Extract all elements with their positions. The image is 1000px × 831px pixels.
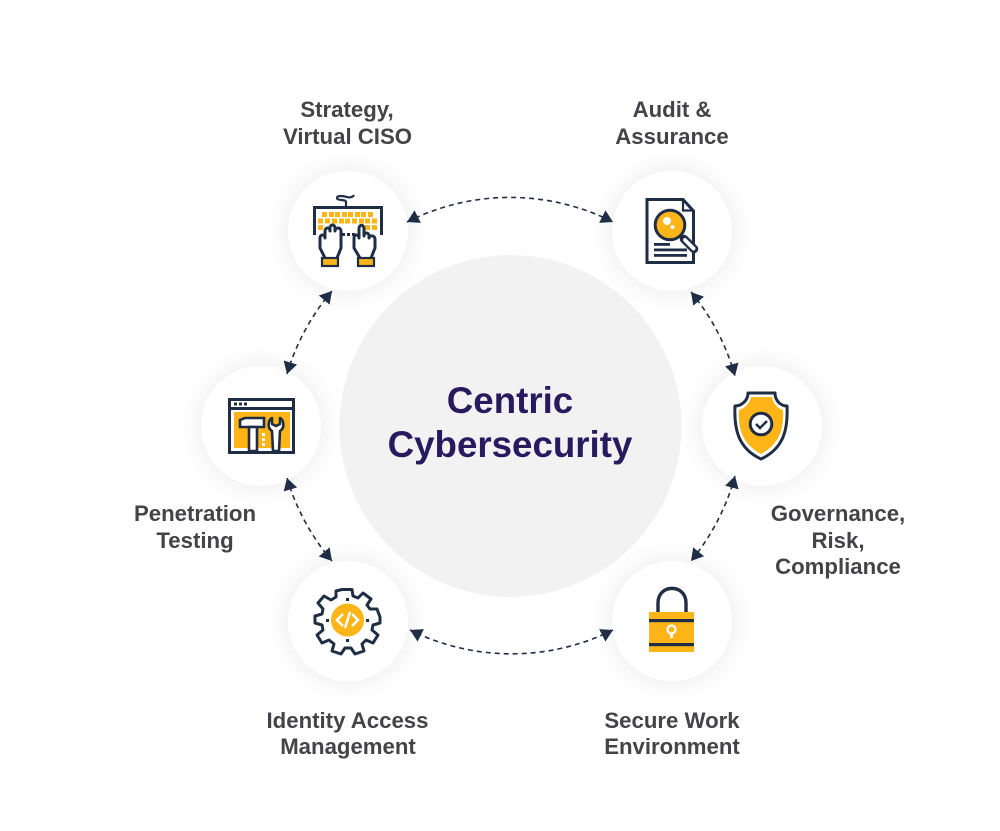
central title <box>388 380 633 465</box>
central circle <box>340 255 682 597</box>
right hand <box>354 225 375 258</box>
icon: shield with check <box>735 393 787 459</box>
panel: penetration testing <box>134 366 321 553</box>
arrow: governance to secure work <box>691 476 735 561</box>
arrow: strategy to audit <box>407 197 613 222</box>
icon: gear with code <box>315 590 380 654</box>
icon: keyboard and hands <box>314 195 382 266</box>
label: governance: Risk, <box>811 528 865 553</box>
icon: browser with tools <box>229 400 294 452</box>
panel: identity access <box>267 561 428 759</box>
label: audit <box>615 97 729 149</box>
label: secure work: Secure Work <box>604 708 740 733</box>
panel: strategy <box>283 97 412 291</box>
label: identity access: Identity Access <box>267 708 428 733</box>
label: audit: Assurance <box>615 124 729 149</box>
label: identity access <box>267 708 428 759</box>
label: governance <box>771 501 905 579</box>
arrow: secure work to identity <box>410 630 613 654</box>
label: strategy: Virtual CISO <box>283 124 412 149</box>
central title: Centric <box>447 380 573 421</box>
central title: Cybersecurity <box>388 424 633 465</box>
label: identity access: Management <box>280 734 416 759</box>
icon: padlock <box>649 588 694 652</box>
label: penetration testing: Testing <box>156 528 234 553</box>
label: strategy <box>283 97 412 149</box>
label: audit: Audit & <box>633 97 711 122</box>
label: governance: Governance, <box>771 501 905 526</box>
label: strategy: Strategy, <box>300 97 394 122</box>
panel: audit <box>612 97 732 291</box>
label: secure work: Environment <box>604 734 740 759</box>
arrow: penetration to strategy <box>287 291 332 374</box>
label: penetration testing <box>134 501 256 553</box>
label: secure work <box>604 708 740 759</box>
panel: secure work <box>604 561 740 759</box>
arrow: identity to penetration <box>287 478 332 561</box>
label: governance: Compliance <box>775 554 901 579</box>
arrow: audit to governance <box>691 292 735 376</box>
icon: document with magnifier <box>647 200 694 262</box>
left hand <box>320 225 341 258</box>
panel: governance <box>702 366 905 579</box>
label: penetration testing: Penetration <box>134 501 256 526</box>
